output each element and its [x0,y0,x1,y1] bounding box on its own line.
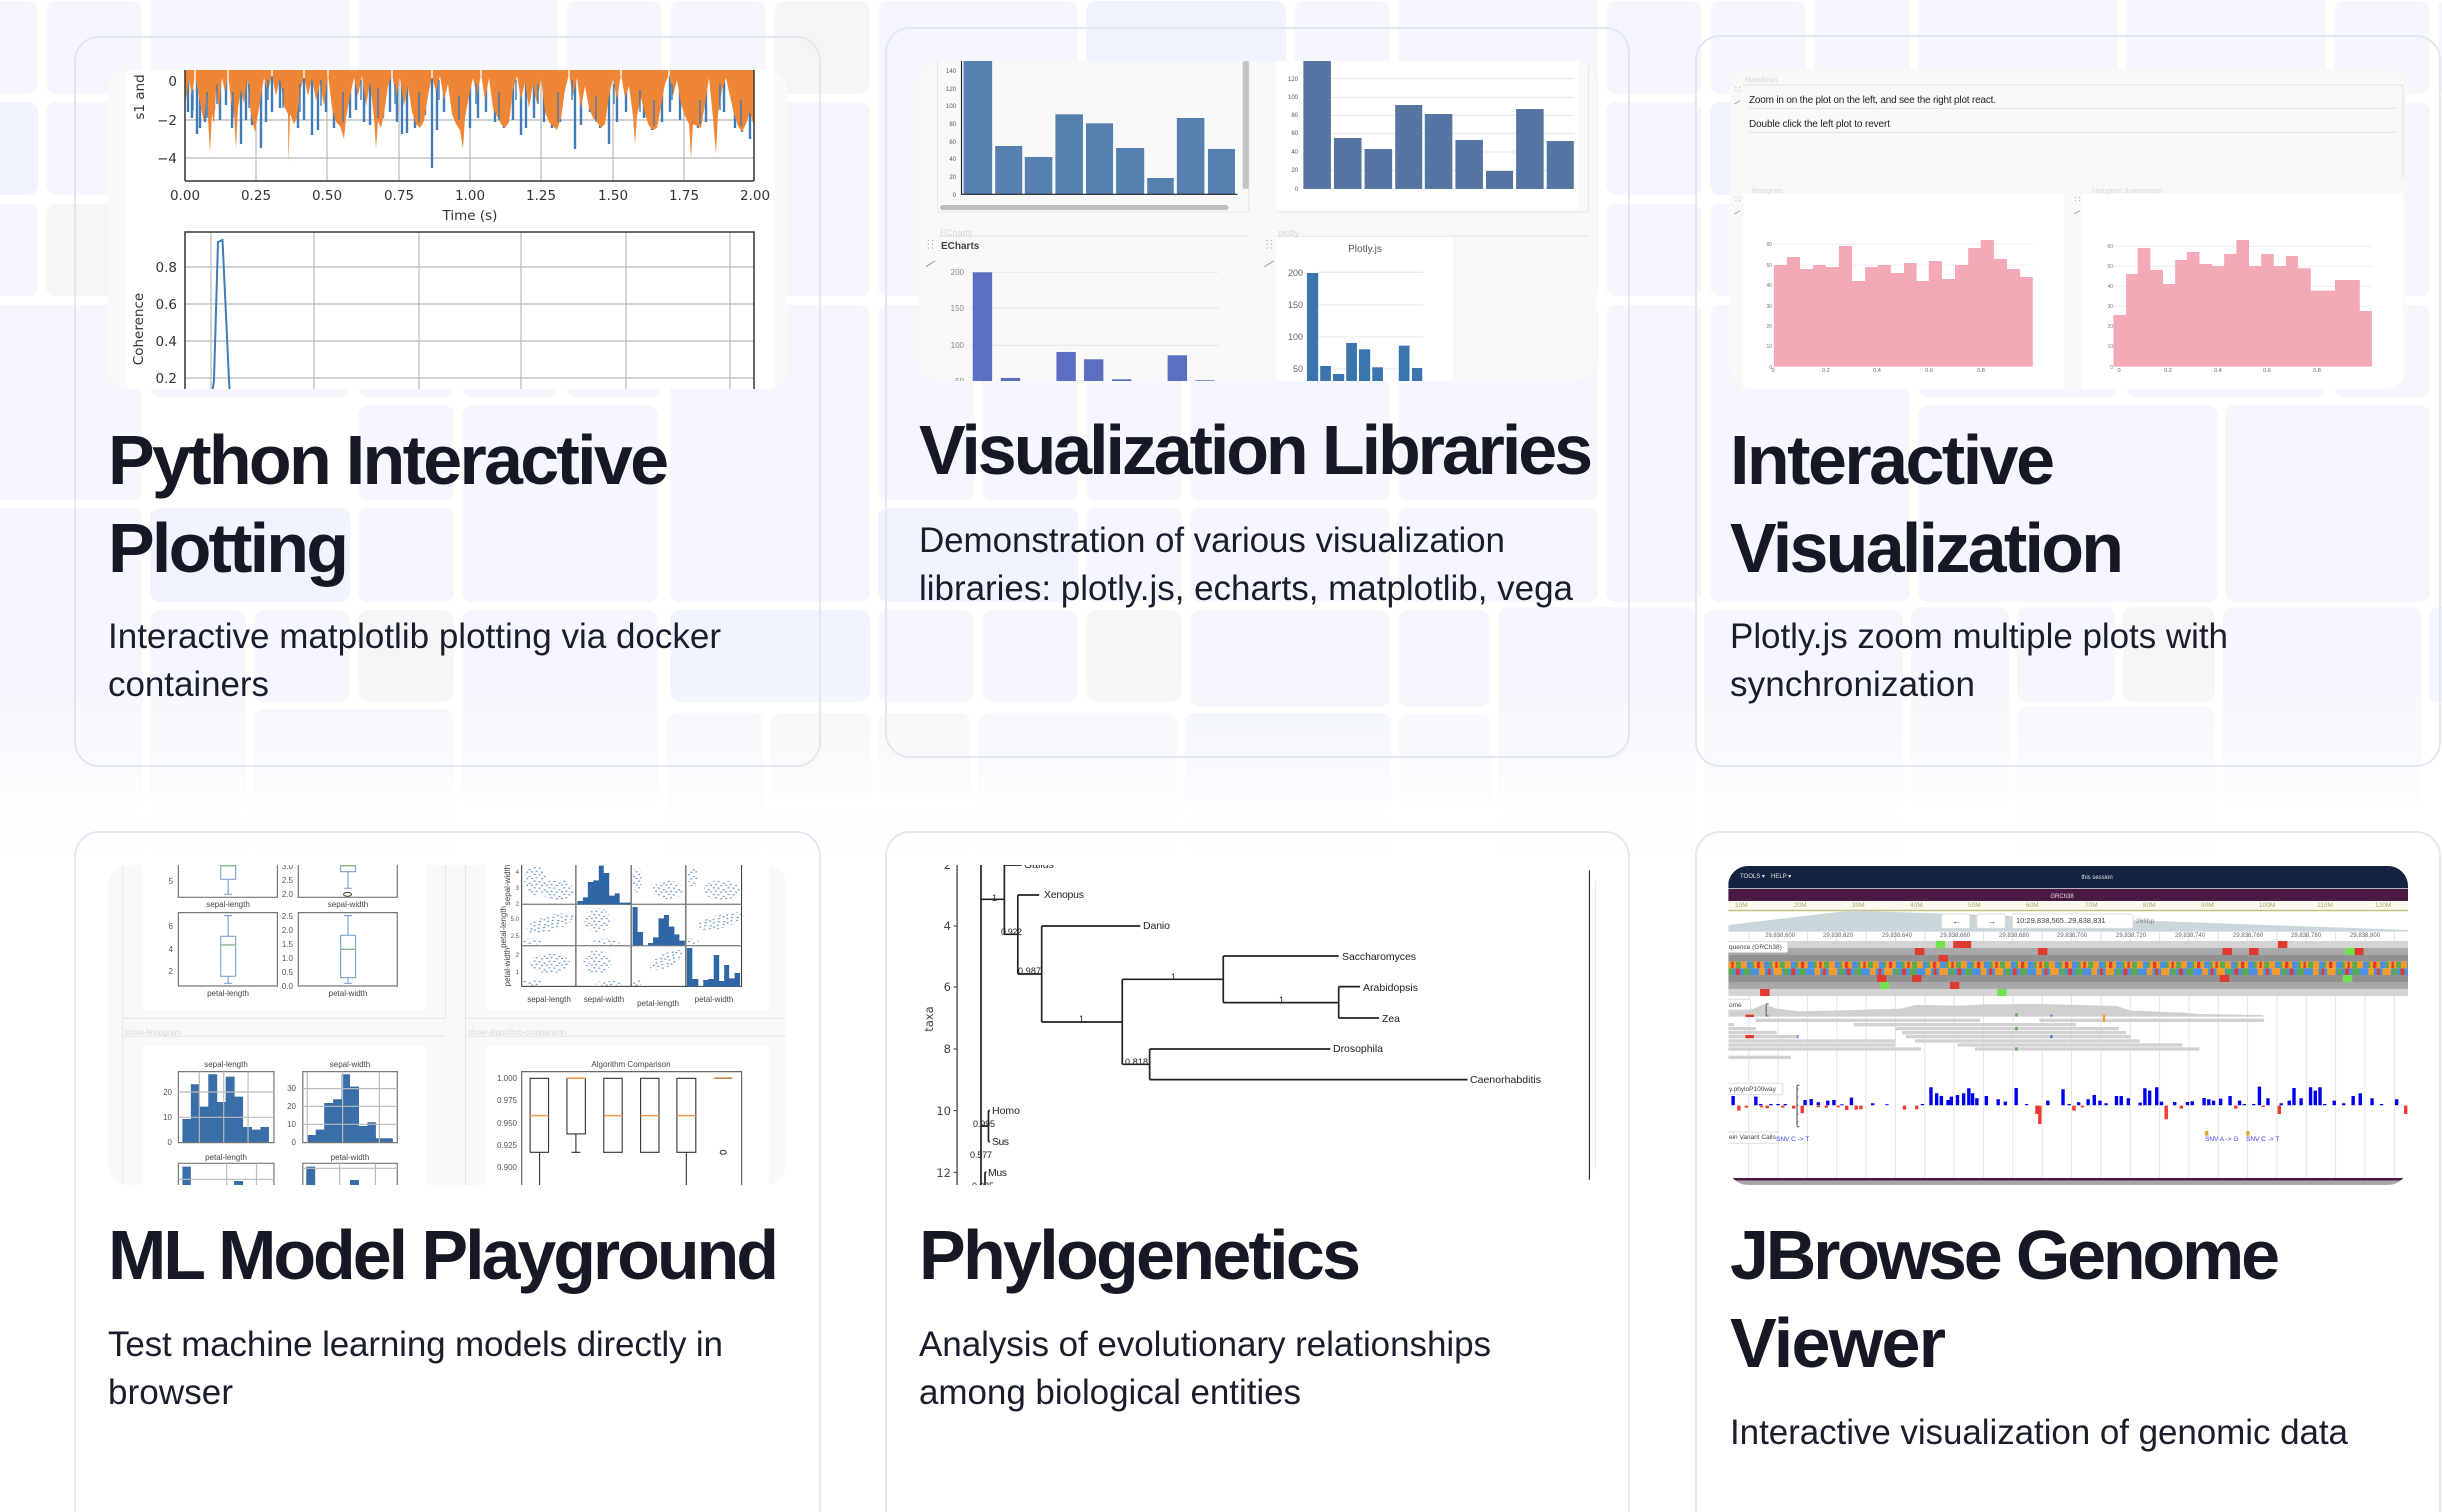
chart: JBrowse genome browser screenshot: 29,838,720 [2116,933,2147,939]
chart: phylogenetic tree: 0.818 [1125,1057,1148,1067]
chart: phylogenetic tree: taxa [922,1006,936,1032]
chart: four library bar charts screenshot: 100 [946,104,957,110]
chart: phylogenetic tree: Saccharomyces [1342,951,1416,963]
chart: JBrowse genome browser screenshot: 29,838,640 [1882,933,1913,939]
description: Analysis of evolutionary relationships [919,1325,1491,1364]
chart: iris plots screenshot: 2.0 [282,890,294,899]
chart: four library bar charts screenshot [919,57,1596,386]
title: Visualization [1730,509,2124,587]
chart: iris plots screenshot: 5.0 [511,917,520,923]
chart: linked pink histograms screenshot: 60 [1766,242,1772,248]
chart: JBrowse genome browser screenshot: 29,838,740 [2175,933,2206,939]
phyloP conservation bars [1733,1087,2397,1105]
chart: four library bar charts screenshot: 0 [953,193,957,199]
chart: phylogenetic tree: Zea [1382,1013,1400,1025]
chart: phylogenetic tree: Homo [992,1105,1020,1117]
chart: four library bar charts screenshot: 40 [949,157,957,163]
chart: iris plots screenshot: sepal-width [330,1060,370,1069]
title: Python Interactive [108,421,669,499]
chart: linked pink histograms screenshot: 0 [1769,365,1772,371]
chart: iris plots screenshot: sepal-width [503,865,512,905]
chart: iris plots screenshot: 0 [292,1138,297,1147]
chart: JBrowse genome browser screenshot: ← [1952,916,1961,926]
chart: linked pink histograms screenshot [1730,69,2406,389]
chart: iris plots screenshot: 10 [163,1113,173,1122]
chart: iris plots screenshot: show-histogram [125,1028,182,1037]
chart: JBrowse genome browser screenshot: 110M [2317,902,2333,909]
chart: JBrowse genome browser screenshot: this session [2081,875,2113,881]
chart: linked pink histograms screenshot: 0.2 [2164,368,2172,374]
chart: signals and coherence screenshot [108,70,787,402]
chart: four library bar charts screenshot: 200 [951,268,965,277]
description: Test machine learning models directly in [108,1325,723,1364]
chart: iris plots screenshot: 0.0 [282,982,294,991]
chart: JBrowse genome browser screenshot: 120M [2375,902,2391,909]
chart: iris plots screenshot: show-algorithm-comparison [468,1028,566,1037]
description [108,617,721,704]
description: Interactive matplotlib plotting via docker [108,617,721,656]
chart: four library bar charts screenshot: 40 [1291,150,1299,156]
chart: four library bar charts screenshot: 20 [1291,168,1299,174]
chart: JBrowse genome browser screenshot: 30M [1852,902,1865,909]
chart: phylogenetic tree: Xenopus [1044,889,1084,901]
chart: iris plots screenshot: 1.5 [282,940,294,949]
chart: phylogenetic tree: 0.995 [973,1119,995,1129]
chart: phylogenetic tree: Arabidopsis [1363,982,1418,994]
chart: four library bar charts screenshot: 60 [1291,131,1299,137]
chart: four library bar charts screenshot: 20 [949,175,957,181]
chart: signals and coherence screenshot: 0.50 [312,188,342,204]
card frame [75,832,820,1512]
chart: phylogenetic tree: Danio [1143,920,1170,932]
chart: iris plots screenshot: 2.5 [511,934,520,940]
chart: four library bar charts screenshot: 80 [1291,113,1299,119]
chart: signals and coherence screenshot: 1.50 [598,188,628,204]
chart: signals and coherence screenshot: 0.4 [156,334,177,350]
chart: iris plots screenshot: 2 [169,967,174,976]
chart: JBrowse genome browser screenshot: 29,838,620 [1823,933,1854,939]
chart: signals and coherence screenshot: 0.2 [156,371,177,387]
chart: signals and coherence screenshot: 1.00 [455,188,485,204]
chart: iris plots screenshot: 2.0 [282,926,294,935]
chart: JBrowse genome browser screenshot: ein Variant Calls [1729,1134,1777,1141]
chart: four library bar charts screenshot: 200 [1288,268,1303,278]
description: browser [108,1373,233,1412]
chart: phylogenetic tree: 0.922 [1001,927,1022,937]
card: Visualization Libraries [886,28,1629,757]
chart: JBrowse genome browser screenshot: 10:29,838,565..29,838,831 [2016,916,2106,925]
chart: iris plots screenshot: sepal-length [206,900,250,909]
description: Demonstration of various visualization [919,521,1505,560]
chart: iris plots screenshot: 6 [169,922,174,931]
chart: JBrowse genome browser screenshot: 90M [2201,902,2214,909]
description [108,1325,723,1412]
card: ML Model Playground [75,832,820,1512]
description: synchronization [1730,665,1975,704]
chart: iris plots screenshot: 0.975 [497,1096,518,1105]
chart: iris plots screenshot: sepal-width [328,900,368,909]
chart: iris plots screenshot: 0.950 [497,1119,518,1128]
chart: signals and coherence screenshot: 0 [168,74,177,90]
chart: phylogenetic tree: 6 [944,980,951,994]
description [919,1325,1491,1412]
chart: JBrowse genome browser screenshot: y.phyloP100way [1729,1086,1777,1093]
chart: phylogenetic tree: Caenorhabditis [1470,1074,1541,1086]
chart: signals and coherence screenshot: 0.6 [156,297,177,313]
chart: JBrowse genome browser screenshot: 29,838,800 [2350,933,2381,939]
chart: signals and coherence screenshot: Time (s) [442,208,497,224]
title: Visualization Libraries [919,411,1593,489]
chart: signals and coherence screenshot: −4 [157,151,177,167]
card: Interactive Visualization [1696,36,2440,766]
chart: JBrowse genome browser screenshot: GRCh38 [2050,894,2074,900]
chart: iris plots screenshot: 5 [169,877,174,886]
chart: four library bar charts screenshot: 100 [1288,95,1299,101]
chart: four library bar charts screenshot: 120 [946,87,957,93]
chart: linked pink histograms screenshot: 20 [1766,324,1772,330]
chart: iris plots screenshot: petal-length [637,999,679,1008]
description [919,521,1574,608]
chart: linked pink histograms screenshot: 0.6 [1925,368,1933,374]
chart: phylogenetic tree: 0.987 [1018,966,1041,976]
chart: iris plots screenshot: petal-length [205,1153,247,1162]
chart: phylogenetic tree: Sus [992,1136,1009,1148]
chart: four library bar charts screenshot: ECharts [940,228,973,238]
chart: JBrowse genome browser screenshot: 70M [2085,902,2098,909]
chart: four library bar charts screenshot: 60 [949,140,957,146]
chart: linked pink histograms screenshot: 30 [1766,304,1772,310]
chart: iris plots screenshot: 2.5 [282,876,294,885]
right histogram [2113,240,2372,367]
chart: four library bar charts screenshot: 100 [1288,332,1303,342]
chart: phylogenetic tree: 1 [1171,972,1176,982]
chart: signals and coherence screenshot: Coherence [131,293,147,365]
chart: four library bar charts screenshot: 120 [1288,77,1299,83]
chart: four library bar charts screenshot: 150 [1288,300,1303,310]
title: Plotting [108,509,349,587]
chart: signals and coherence screenshot: 1.75 [669,188,699,204]
title [1730,421,2124,587]
chart: linked pink histograms screenshot: 40 [2107,284,2113,290]
chart: JBrowse genome browser screenshot: quence (GRCh38) [1729,944,1782,951]
chart: iris plots screenshot: 0 [168,1138,173,1147]
chart: linked pink histograms screenshot: Double click the left plot to revert [1749,119,1890,130]
chart: JBrowse genome browser screenshot: HELP ▾ [1771,874,1791,880]
chart: JBrowse genome browser screenshot: 29,838,660 [1940,933,1971,939]
chart: JBrowse genome browser screenshot: 80M [2143,902,2156,909]
chart: iris plots screenshot: petal-width [329,989,367,998]
chart: JBrowse genome browser screenshot: 29,838,700 [2057,933,2088,939]
chart: iris plots screenshot: 30 [287,1084,297,1093]
chart: JBrowse genome browser screenshot: 50M [1968,902,1981,909]
chart: iris plots screenshot: sepal-length [204,1060,248,1069]
chart: JBrowse genome browser screenshot: SNV A -> G [2205,1136,2238,1143]
chart: four library bar charts screenshot: ECharts [941,241,980,252]
chart: JBrowse genome browser screenshot: 29,838,680 [1999,933,2030,939]
chart: four library bar charts screenshot: 80 [949,122,957,128]
chart: iris plots screenshot: 20 [287,1102,297,1111]
chart: linked pink histograms screenshot: 0.4 [1873,368,1881,374]
chart: linked pink histograms screenshot: 0.8 [1977,368,1985,374]
chart: JBrowse genome browser screenshot [1721,866,2408,1185]
chart: JBrowse genome browser screenshot: → [1987,916,1996,926]
description: among biological entities [919,1373,1301,1412]
chart: linked pink histograms screenshot: 0 [1771,368,1775,374]
chart: linked pink histograms screenshot: histogram [1752,188,1783,195]
chart: JBrowse genome browser screenshot: SNV C -> T [1776,1136,1809,1143]
chart: signals and coherence screenshot: −2 [157,113,177,129]
card frame [1696,832,2440,1512]
chart: iris plots screenshot: Algorithm Comparison [591,1060,671,1069]
chart: phylogenetic tree: 10 [936,1104,951,1118]
chart: iris plots screenshot: 3 [516,886,520,892]
chart: JBrowse genome browser screenshot: 266bp [2136,918,2154,925]
chart: iris plots screenshot: 1 [516,970,520,976]
description: Interactive visualization of genomic data [1730,1413,2349,1452]
chart: linked pink histograms screenshot: 0 [2110,365,2113,371]
description [1730,617,2228,704]
chart: four library bar charts screenshot: 50 [955,377,965,386]
chart: four library bar charts screenshot: Plotly.js [1348,244,1382,255]
chart: four library bar charts screenshot: 0 [1295,187,1299,193]
chart: signals and coherence screenshot: 0.25 [241,188,271,204]
card: JBrowse Genome Viewer [1696,832,2440,1512]
chart: linked pink histograms screenshot: 60 [2107,244,2113,250]
chart: linked pink histograms screenshot: 50 [1766,263,1772,269]
chart: JBrowse genome browser screenshot: SNV C -> T [2246,1136,2279,1143]
chart: phylogenetic tree: 2 [944,858,951,872]
chart: iris plots screenshot: sepal-length [527,995,571,1004]
chart: signals and coherence screenshot: 0.00 [170,188,200,204]
description: Plotly.js zoom multiple plots with [1730,617,2228,656]
card frame [886,832,1629,1512]
chart: linked pink histograms screenshot: histogram downstream [2092,188,2163,195]
chart: phylogenetic tree: 1 [992,893,997,903]
chart: signals and coherence screenshot: s1 and [132,74,148,120]
chart: signals and coherence screenshot: 2.00 [740,188,770,204]
chart: signals and coherence screenshot: 0.8 [156,260,177,276]
chart: iris plots screenshot: 10 [287,1120,297,1129]
chart: linked pink histograms screenshot: Markdown [1745,77,1777,84]
chart: linked pink histograms screenshot: 10 [2107,344,2113,350]
chart: phylogenetic tree: 8 [944,1042,951,1056]
chart: linked pink histograms screenshot: 10 [1766,344,1772,350]
card frame [886,28,1629,757]
chart: iris plots screenshot: 0.925 [497,1141,518,1150]
chart: JBrowse genome browser screenshot: 29,838,760 [2233,933,2264,939]
chart: iris plots screenshot [108,862,786,1187]
chart: phylogenetic tree: 1 [1079,1014,1084,1024]
chart: iris plots screenshot: 0.5 [282,968,294,977]
chart: iris plots screenshot: petal-width [503,948,512,986]
card frame [75,37,820,766]
title [108,421,669,587]
chart: linked pink histograms screenshot: Zoom in on the plot on the left, and see the right plot react. [1749,95,1996,106]
chart: iris plots screenshot: 2 [516,953,520,959]
chart: iris plots screenshot: petal-length [207,989,249,998]
title: ML Model Playground [108,1216,779,1294]
chart: phylogenetic tree: Mus [988,1167,1007,1179]
chart: JBrowse genome browser screenshot: 20M [1794,902,1807,909]
chart: phylogenetic tree: 4 [944,919,951,933]
left histogram [1774,240,2033,367]
chart: signals and coherence screenshot: 0.75 [384,188,414,204]
chart: four library bar charts screenshot: 150 [951,304,965,313]
chart: phylogenetic tree: 12 [936,1166,951,1180]
chart: linked pink histograms screenshot: 20 [2107,324,2113,330]
chart: iris plots screenshot: 0.900 [497,1163,518,1172]
card: Phylogenetics [886,832,1629,1512]
description: libraries: plotly.js, echarts, matplotlib, vega [919,569,1574,608]
chart: JBrowse genome browser screenshot: 29,838,780 [2291,933,2322,939]
chart: phylogenetic tree [919,858,1596,1191]
chart: phylogenetic tree: Gallus [1024,859,1054,871]
chart: iris plots screenshot: 4 [516,870,520,876]
chart: signals and coherence screenshot: 1.25 [526,188,556,204]
chart: iris plots screenshot: 3.0 [282,862,294,871]
chart: iris plots screenshot: 2 [516,902,520,908]
card frame [1696,36,2440,766]
chart: JBrowse genome browser screenshot: 40M [1910,902,1923,909]
chart: linked pink histograms screenshot: 0.6 [2263,368,2271,374]
chart: iris plots screenshot: petal-width [331,1153,369,1162]
chart: four library bar charts screenshot: 50 [1293,364,1303,374]
chart: iris plots screenshot: petal-length [499,906,508,948]
chart: iris plots screenshot: 2.5 [282,912,294,921]
chart: JBrowse genome browser screenshot: 10M [1735,902,1748,909]
orange signal [185,70,754,163]
chart: linked pink histograms screenshot: 0 [2117,368,2121,374]
title: Phylogenetics [919,1216,1361,1294]
title: Viewer [1730,1304,1946,1382]
title [1730,1216,2280,1382]
chart: linked pink histograms screenshot: 50 [2107,264,2113,270]
description: containers [108,665,269,704]
chart: linked pink histograms screenshot: 0.8 [2313,368,2321,374]
chart: iris plots screenshot: 4 [169,945,174,954]
title: JBrowse Genome [1730,1216,2280,1294]
chart: JBrowse genome browser screenshot: TOOLS ▾ [1740,874,1765,880]
chart: four library bar charts screenshot: plotly [1278,228,1300,238]
chart: phylogenetic tree: 0.577 [970,1150,992,1160]
chart: iris plots screenshot: petal-width [695,995,733,1004]
chart: phylogenetic tree: Drosophila [1333,1043,1383,1055]
chart: four library bar charts screenshot: 140 [946,69,957,75]
chart: JBrowse genome browser screenshot: ome [1729,1002,1742,1009]
chart: phylogenetic tree: 0.985 [972,1181,994,1191]
chart: iris plots screenshot: 1.0 [282,954,294,963]
chart: iris plots screenshot: 1.000 [497,1074,518,1083]
chart: phylogenetic tree: 1 [1279,995,1284,1005]
chart: linked pink histograms screenshot: 30 [2107,304,2113,310]
chart: linked pink histograms screenshot: 0.4 [2214,368,2222,374]
chart: linked pink histograms screenshot: 0.2 [1822,368,1830,374]
chart: linked pink histograms screenshot: 40 [1766,283,1772,289]
title: Interactive [1730,421,2055,499]
chart: JBrowse genome browser screenshot: 100M [2259,902,2275,909]
chart: JBrowse genome browser screenshot: 60M [2026,902,2039,909]
chart: iris plots screenshot: sepal-width [584,995,624,1004]
chart: iris plots screenshot: 20 [163,1088,173,1097]
chart: four library bar charts screenshot: 100 [951,341,965,350]
card: Python Interactive Plotting [75,37,820,766]
chart: JBrowse genome browser screenshot: 29,838,600 [1765,933,1796,939]
